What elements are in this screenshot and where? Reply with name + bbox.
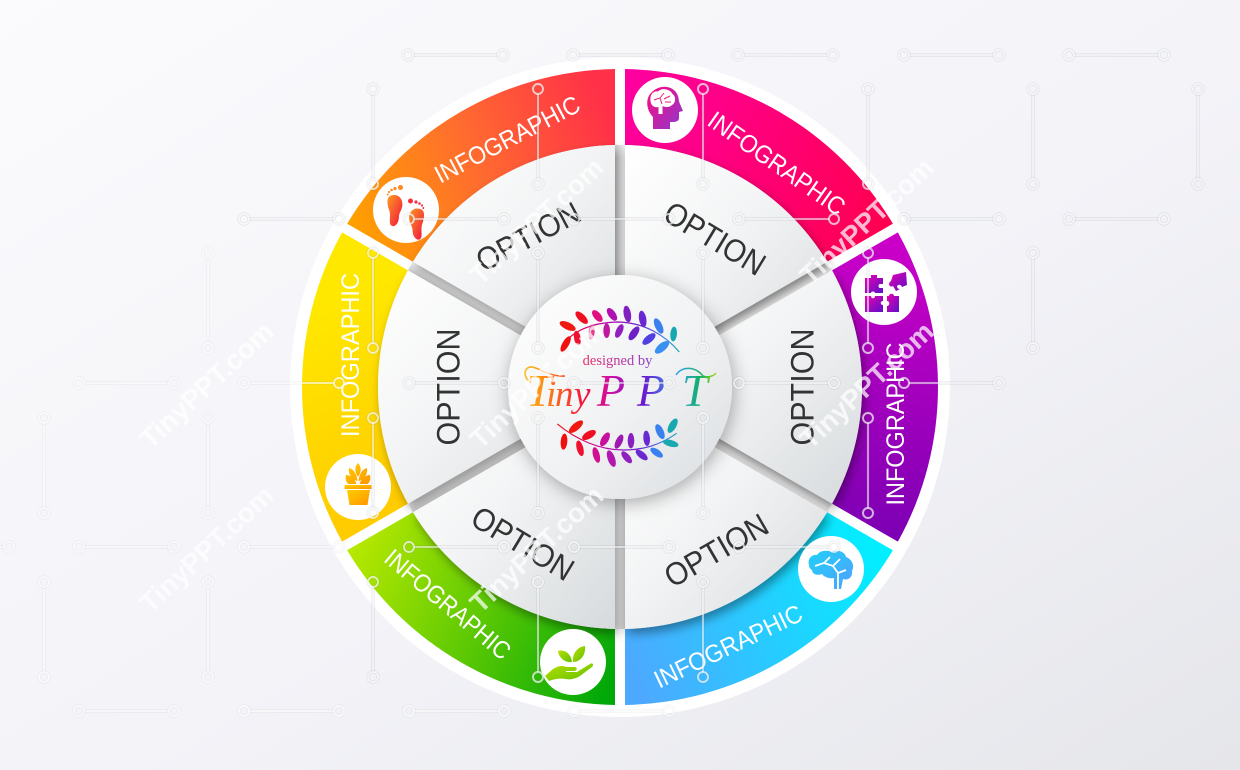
label: purple: INFOGRAPHIC (882, 342, 910, 506)
logo: top wreath (558, 305, 679, 356)
segment: magenta (625, 69, 893, 262)
option: upper left: OPTION (470, 194, 587, 279)
icon: hand with plant (540, 629, 606, 695)
INFOGRAPHIC labels (337, 91, 910, 694)
icon: brain (798, 536, 864, 602)
segment: orange (347, 69, 615, 262)
label: yellow: INFOGRAPHIC (337, 273, 365, 437)
watermarks: TinyPPT.com (464, 316, 609, 455)
watermarks: TinyPPT.com (464, 152, 609, 291)
option sector: lower left (413, 396, 615, 629)
coloured ring segments (302, 69, 938, 705)
logo: flourishes (525, 367, 716, 382)
logo: Tiny PPT: iny (546, 374, 591, 415)
watermarks (134, 152, 939, 619)
icon: head with brain (632, 77, 698, 143)
watermarks: TinyPPT.com (464, 480, 609, 619)
option: upper right: OPTION (657, 194, 772, 283)
option: lower left: OPTION (465, 499, 580, 588)
white outer ring (290, 57, 950, 717)
label: orange: INFOGRAPHIC (430, 91, 585, 189)
watermarks: TinyPPT.com (794, 152, 939, 291)
watermarks: TinyPPT.com (134, 316, 279, 455)
watermarks: TinyPPT.com (794, 316, 939, 455)
watermarks: TinyPPT.com (134, 480, 279, 619)
label: green: INFOGRAPHIC (379, 544, 516, 666)
option sector: upper right (625, 145, 827, 378)
option sector: upper left (413, 145, 615, 378)
logo: Tiny PPT: T (526, 365, 555, 416)
option: left: OPTION (430, 328, 466, 446)
centre logo (525, 305, 716, 468)
option sector: right (630, 270, 862, 504)
label: cyan: INFOGRAPHIC (650, 600, 807, 694)
segment: yellow (302, 232, 408, 542)
segment: purple (832, 232, 938, 542)
spoke shadow strips (408, 145, 832, 629)
centre disc (508, 275, 732, 499)
option sectors (378, 145, 862, 629)
label: magenta: INFOGRAPHIC (702, 106, 850, 221)
option: right: OPTION (784, 328, 820, 446)
icon: footprints (373, 177, 439, 243)
icon: puzzle (851, 259, 917, 325)
icon: potted plant (325, 454, 391, 520)
option sector: left (378, 270, 610, 504)
logo: bottom wreath (557, 417, 680, 468)
segment: cyan (625, 512, 893, 705)
OPTION labels (430, 194, 820, 595)
logo: Tiny PPT: PPT (596, 365, 711, 416)
segment: green (347, 512, 615, 705)
option: lower right: OPTION (658, 506, 775, 595)
logo: designed by: designed by (583, 353, 653, 369)
option sector: lower right (625, 396, 827, 629)
